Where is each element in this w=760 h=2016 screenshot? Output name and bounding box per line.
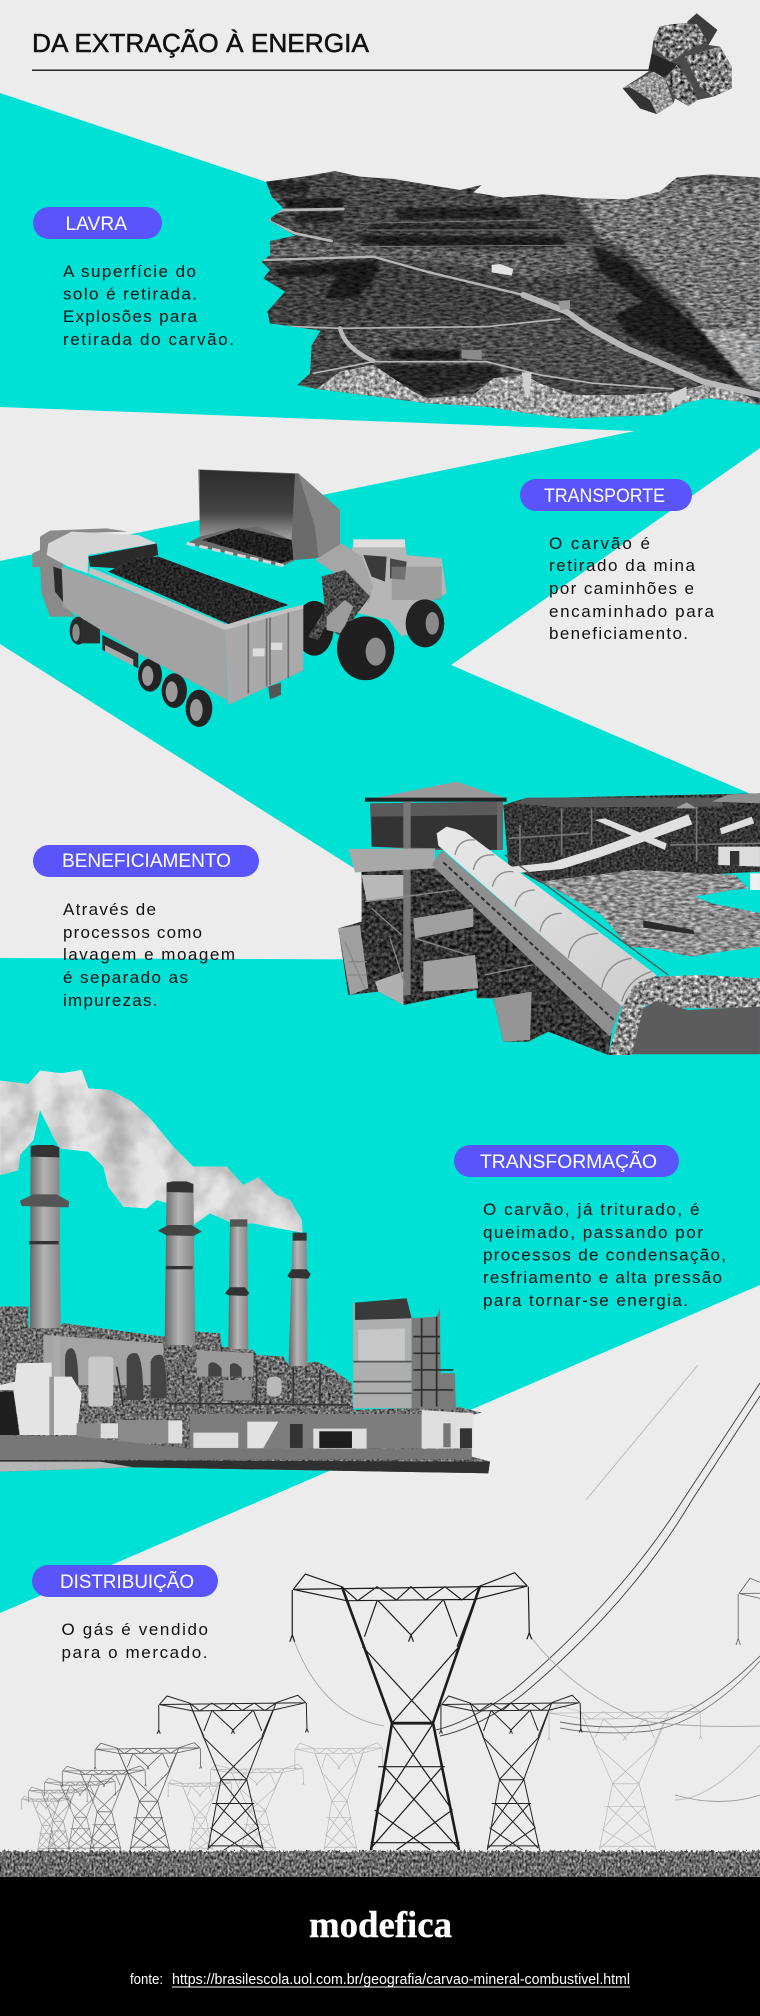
- panel: lavra: [33, 207, 234, 349]
- text: transformação: [483, 1200, 726, 1310]
- mid towers: [21, 1577, 760, 1850]
- panel: distribuição: [32, 1565, 218, 1662]
- white block: [0, 1363, 82, 1435]
- photo: truck and loader: [32, 469, 447, 727]
- trailer under-frame: [102, 635, 138, 668]
- faint towers: [168, 1704, 702, 1850]
- text: transporte: O carvão é: [549, 534, 650, 553]
- loader wheel left: [295, 601, 334, 656]
- text: lavra: retirada do carvão.: [63, 330, 234, 349]
- trailer: [47, 532, 303, 705]
- truck wheels: [70, 617, 87, 645]
- silo and tower: [353, 1298, 456, 1410]
- icon: coal: [623, 13, 732, 114]
- text: beneficiamento: Através de: [63, 900, 156, 919]
- text: transporte: encaminhado para: [549, 602, 715, 621]
- low buildings: [77, 1410, 473, 1449]
- pill: beneficiamento: BENEFICIAMENTO: [62, 851, 231, 872]
- lower steel structure: [338, 865, 612, 1055]
- text: lavra: [63, 262, 234, 349]
- text: distribuição: [62, 1620, 208, 1662]
- text: beneficiamento: é separado as: [63, 968, 188, 987]
- text: transformação: O carvão, já triturado, é: [483, 1200, 700, 1219]
- photo: conveyor plant: [338, 782, 760, 1055]
- text: transformação: para tornar-se energia.: [483, 1291, 688, 1310]
- pill: distribuição: [32, 1565, 218, 1597]
- text: transformação: queimado, passando por: [483, 1223, 703, 1242]
- title rule: [32, 70, 652, 71]
- pill: transporte: [520, 479, 692, 511]
- text: lavra: solo é retirada.: [63, 284, 197, 304]
- plant mass: [0, 1307, 490, 1473]
- logo: modefica: modefica: [309, 1905, 452, 1946]
- panel: beneficiamento: [33, 845, 259, 1010]
- panel: transformação: [454, 1145, 726, 1310]
- background shed: [503, 793, 760, 890]
- photo: open-pit mine: [260, 165, 760, 425]
- text: transformação: resfriamento e alta pressão: [483, 1268, 722, 1287]
- text: transporte: [549, 534, 715, 643]
- tarp: [632, 1002, 760, 1054]
- pill: lavra: LAVRA: [66, 214, 127, 235]
- text: transporte: beneficiamento.: [549, 624, 688, 643]
- pill: transformação: [454, 1145, 679, 1177]
- teal ribbon background: [0, 93, 760, 1613]
- pill: transformação: TRANSFORMAÇÃO: [480, 1151, 657, 1173]
- text: lavra: Explosões para: [63, 307, 198, 326]
- tower top: [338, 782, 532, 1042]
- text: beneficiamento: [63, 900, 235, 1010]
- main tower: [290, 1573, 532, 1850]
- text: lavra: A superfície do: [63, 262, 196, 281]
- text: beneficiamento: lavagem e moagem: [63, 945, 235, 964]
- wires: [292, 1365, 760, 1802]
- ground: [542, 870, 760, 957]
- panel: transporte: [520, 479, 715, 643]
- loader body: [308, 539, 447, 680]
- ground strip: [0, 1435, 490, 1473]
- text: transporte: retirado da mina: [549, 556, 696, 575]
- source: https://brasilescola.uol.com.br/geografia/carvao-mineral-combustivel.html: [172, 1971, 630, 1988]
- photo: transmission towers: [0, 1365, 760, 1881]
- text: distribuição: O gás é vendido: [62, 1620, 208, 1639]
- text: beneficiamento: processos como: [63, 923, 202, 942]
- loader bucket: [187, 469, 340, 567]
- footer: [0, 1877, 760, 2016]
- pill: lavra: [33, 207, 162, 239]
- main covered conveyor: [437, 827, 657, 1007]
- walkway: [432, 850, 622, 1037]
- text: transporte: por caminhões e: [549, 579, 694, 598]
- title: DA EXTRAÇÃO À ENERGIA: [32, 29, 369, 58]
- text: beneficiamento: impurezas.: [63, 991, 158, 1010]
- photo: power plant: [0, 1070, 490, 1473]
- text: transformação: processos de condensação,: [483, 1246, 726, 1264]
- truck cab: [32, 528, 128, 617]
- stacks: [20, 1145, 311, 1366]
- pill: transporte: TRANSPORTE: [544, 486, 665, 507]
- grass: [0, 1851, 760, 1881]
- smoke: [0, 1070, 303, 1233]
- text: distribuição: para o mercado.: [62, 1643, 208, 1662]
- secondary conveyors: [512, 814, 754, 873]
- pill: distribuição: DISTRIBUIÇÃO: [60, 1571, 194, 1593]
- pill: beneficiamento: [33, 845, 259, 877]
- trailer wheels: [138, 658, 212, 727]
- source: fonte:: [130, 1971, 163, 1988]
- boiler halls with arches: [43, 1335, 350, 1407]
- rock pile: [608, 975, 760, 1055]
